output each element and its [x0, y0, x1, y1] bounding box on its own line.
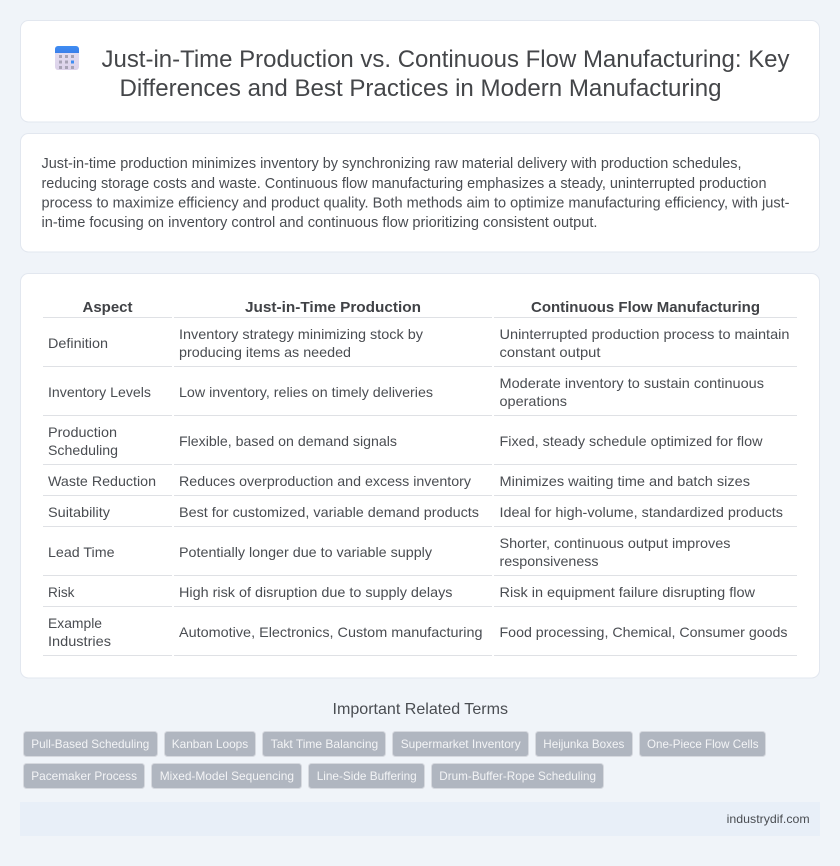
- row: inventory levels: operations: [500, 393, 567, 409]
- tag: supermarket inventory: Supermarket Inventory: [401, 737, 521, 751]
- row: lead time: Lead Time: [48, 544, 115, 560]
- row: production scheduling: Production: [48, 424, 117, 440]
- row: inventory levels: Inventory Levels: [48, 384, 151, 400]
- tag: one-piece flow cells: [640, 732, 766, 756]
- tag: heijunka boxes: [536, 732, 632, 756]
- row: definition: [48, 326, 790, 360]
- tag: takt time balancing: Takt Time Balancing: [271, 737, 378, 751]
- text block: summary paragraph: process to maximize efficiency and product quality. Both methods aim to optimize manufacturing efficiency, with just-: [42, 196, 790, 212]
- row: example industries: Example: [48, 615, 102, 631]
- footer: source domain: industrydif.com: [727, 812, 810, 826]
- row: lead time: [48, 535, 730, 569]
- row: example industries: Automotive, Electronics, Custom manufacturing: [179, 624, 482, 640]
- heading: important related terms: Important Related Terms: [332, 701, 508, 718]
- text block: summary paragraph: in-time focusing on inventory control and continuous flow prioritizing consistent output.: [42, 215, 598, 231]
- row: waste reduction: Minimizes waiting time and batch sizes: [500, 473, 750, 489]
- title: [102, 46, 790, 102]
- row: example industries: [48, 615, 788, 649]
- title: Just-in-Time Production vs. Continuous Flow Manufacturing: Key: [102, 46, 790, 73]
- text block: summary paragraph: reducing storage costs and waste. Continuous flow manufacturing emphasizes a steady, uninterrupted production: [42, 176, 766, 192]
- row: production scheduling: Scheduling: [48, 442, 118, 458]
- table header: Aspect: [82, 299, 132, 316]
- tag: kanban loops: [164, 732, 256, 756]
- tag: mixed-model sequencing: Mixed-Model Sequencing: [160, 769, 294, 783]
- row: definition: Definition: [48, 335, 108, 351]
- row: production scheduling: Flexible, based on demand signals: [179, 433, 397, 449]
- table header: Continuous Flow Manufacturing: [531, 299, 760, 316]
- row: example industries: Industries: [48, 633, 111, 649]
- row: suitability: [48, 504, 783, 520]
- footer: [20, 802, 820, 836]
- tag: pacemaker process: [24, 764, 144, 788]
- row: lead time: responsiveness: [500, 553, 598, 569]
- row: suitability: Ideal for high-volume, standardized products: [500, 504, 783, 520]
- row: waste reduction: [48, 473, 750, 489]
- tag: line-side buffering: [308, 764, 424, 788]
- tag: heijunka boxes: Heijunka Boxes: [543, 737, 624, 751]
- row: inventory levels: Moderate inventory to sustain continuous: [500, 375, 764, 391]
- panel: introduction: [20, 134, 820, 252]
- tag: drum-buffer-rope scheduling: Drum-Buffer-Rope Scheduling: [439, 769, 596, 783]
- tag: mixed-model sequencing: [152, 764, 302, 788]
- tag: supermarket inventory: [392, 732, 528, 756]
- row: definition: producing items as needed: [179, 344, 351, 360]
- row: risk: High risk of disruption due to supply delays: [179, 584, 452, 600]
- row: definition: Inventory strategy minimizing stock by: [179, 326, 423, 342]
- panel: title card: [20, 20, 820, 122]
- row: inventory levels: [48, 375, 764, 409]
- tag: pull-based scheduling: Pull-Based Scheduling: [31, 737, 149, 751]
- row: risk: Risk in equipment failure disrupting flow: [500, 584, 756, 600]
- tag: kanban loops: Kanban Loops: [172, 737, 248, 751]
- tag: one-piece flow cells: One-Piece Flow Cells: [647, 737, 758, 751]
- title: Differences and Best Practices in Modern Manufacturing: [120, 75, 722, 102]
- row: definition: constant output: [500, 344, 601, 360]
- row: suitability: Best for customized, variable demand products: [179, 504, 479, 520]
- table header: [82, 299, 760, 316]
- text block: summary paragraph: [42, 156, 790, 231]
- row: lead time: Potentially longer due to variable supply: [179, 544, 432, 560]
- row: suitability: Suitability: [48, 504, 110, 520]
- icon: calendar: [55, 46, 79, 70]
- row: production scheduling: Fixed, steady schedule optimized for flow: [500, 433, 763, 449]
- tags: related terms: [24, 732, 766, 788]
- tag: takt time balancing: [262, 732, 386, 756]
- tag: drum-buffer-rope scheduling: [432, 764, 604, 788]
- row: production scheduling: [48, 424, 763, 458]
- row: waste reduction: Reduces overproduction and excess inventory: [179, 473, 471, 489]
- tag: line-side buffering: Line-Side Buffering: [317, 769, 417, 783]
- row: risk: [48, 584, 756, 600]
- row: inventory levels: Low inventory, relies on timely deliveries: [179, 384, 433, 400]
- tag: pull-based scheduling: [24, 732, 158, 756]
- row: risk: Risk: [48, 584, 75, 600]
- row: lead time: Shorter, continuous output improves: [500, 535, 730, 551]
- panel: comparison table: [20, 274, 820, 678]
- row: definition: Uninterrupted production process to maintain: [500, 326, 790, 342]
- table header: Just-in-Time Production: [245, 299, 421, 316]
- row: waste reduction: Waste Reduction: [48, 473, 156, 489]
- tag: pacemaker process: Pacemaker Process: [31, 769, 137, 783]
- text block: summary paragraph: Just-in-time production minimizes inventory by synchronizing raw material delivery with production schedules,: [42, 156, 742, 172]
- row: example industries: Food processing, Chemical, Consumer goods: [500, 624, 788, 640]
